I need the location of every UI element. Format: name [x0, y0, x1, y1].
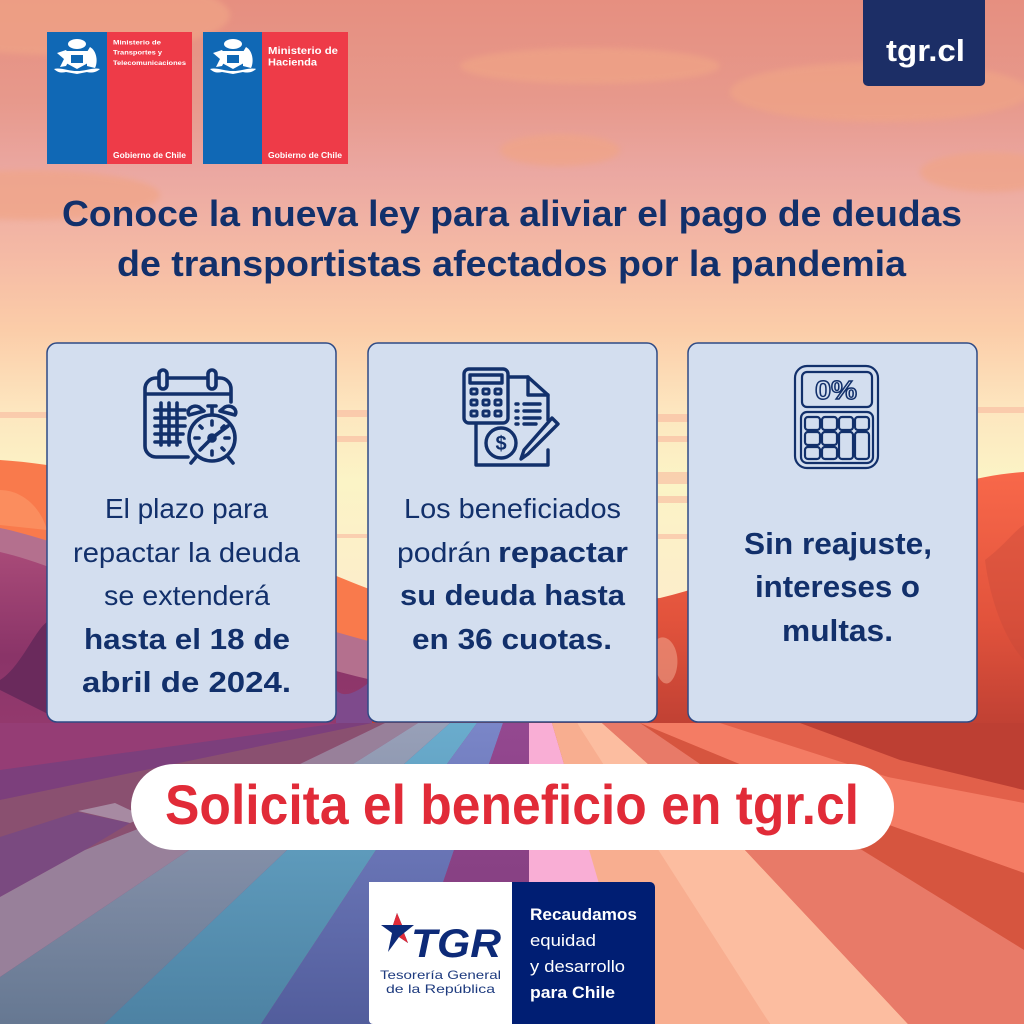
- logo: Tesorería General de la República: Recaudamos: [530, 905, 637, 924]
- text: sin reajuste: intereses o: [755, 569, 920, 604]
- panel: cuotas: [368, 343, 657, 722]
- text: sin reajuste: [744, 526, 932, 648]
- text: plazo: abril de 2024.: [82, 667, 291, 699]
- logo: Ministerio de Hacienda: Hacienda: [268, 56, 317, 68]
- text: cuotas: en 36 cuotas.: [412, 624, 612, 656]
- logo: Tesorería General de la República: TGR: [411, 922, 501, 966]
- road rays: [0, 723, 1024, 1024]
- title: de transportistas afectados por la pandemia: [117, 243, 907, 284]
- text: cuotas: repactar: [498, 537, 628, 569]
- logo: Ministerio de Transportes y Telecomunicaciones: Transportes y: [113, 50, 162, 56]
- icon: dollar sign: $: [495, 433, 507, 455]
- call to action button: Solicita el beneficio en tgr.cl: [165, 773, 859, 836]
- logo: Tesorería General de la República: y desarrollo: [530, 957, 625, 976]
- panel: sin reajuste: [688, 343, 977, 722]
- logo: Tesorería General de la República: Tesorería General: [380, 968, 501, 982]
- call to action button: [131, 764, 894, 850]
- icon: calculator, document and pencil: [464, 369, 558, 465]
- logo: Ministerio de Hacienda: [203, 32, 348, 164]
- logo: Ministerio de Hacienda: Ministerio de: [268, 45, 338, 57]
- logo: Tesorería General de la República: [369, 882, 655, 1024]
- logo: Ministerio de Transportes y Telecomunicaciones: Telecomunicaciones: [113, 60, 186, 67]
- text: plazo: [73, 493, 300, 699]
- text: plazo: repactar la deuda: [73, 537, 300, 568]
- right hills: [372, 472, 1024, 800]
- icon: star: [381, 913, 414, 952]
- logo: Tesorería General de la República: para Chile: [530, 983, 615, 1002]
- icon: calculator 0%: [795, 366, 878, 468]
- badge: tgr.cl: tgr.cl: [886, 33, 965, 68]
- title: [62, 193, 962, 284]
- left hills: [0, 460, 372, 760]
- text: cuotas: podrán: [397, 537, 491, 568]
- text: cuotas: Los beneficiados: [404, 493, 621, 524]
- badge: tgr.cl: [863, 0, 985, 86]
- title: Conoce la nueva ley para aliviar el pago de deudas: [62, 193, 962, 234]
- text: cuotas: [397, 493, 628, 656]
- logo: Ministerio de Transportes y Telecomunicaciones: [47, 32, 192, 164]
- logo: Ministerio de Transportes y Telecomunicaciones: Gobierno de Chile: [113, 151, 187, 160]
- icon: calendar and alarm clock: [145, 370, 236, 463]
- text: plazo: El plazo para: [105, 493, 268, 524]
- logo: Tesorería General de la República: de la República: [386, 982, 495, 996]
- text: plazo: hasta el 18 de: [84, 624, 290, 656]
- logo: Ministerio de Hacienda: Gobierno de Chile: [268, 151, 343, 160]
- icon: coat of arms: [54, 39, 100, 74]
- text: sin reajuste: multas.: [782, 613, 893, 648]
- text: sin reajuste: Sin reajuste,: [744, 526, 932, 561]
- text: plazo: se extenderá: [104, 580, 270, 611]
- logo: Ministerio de Transportes y Telecomunicaciones: Ministerio de: [113, 40, 161, 46]
- panel: plazo: [47, 343, 336, 722]
- icon: coat of arms: [210, 39, 256, 74]
- icon: calculator 0%: 0%: [815, 375, 857, 405]
- text: cuotas: su deuda hasta: [400, 580, 626, 612]
- logo: Tesorería General de la República: equidad: [530, 931, 596, 950]
